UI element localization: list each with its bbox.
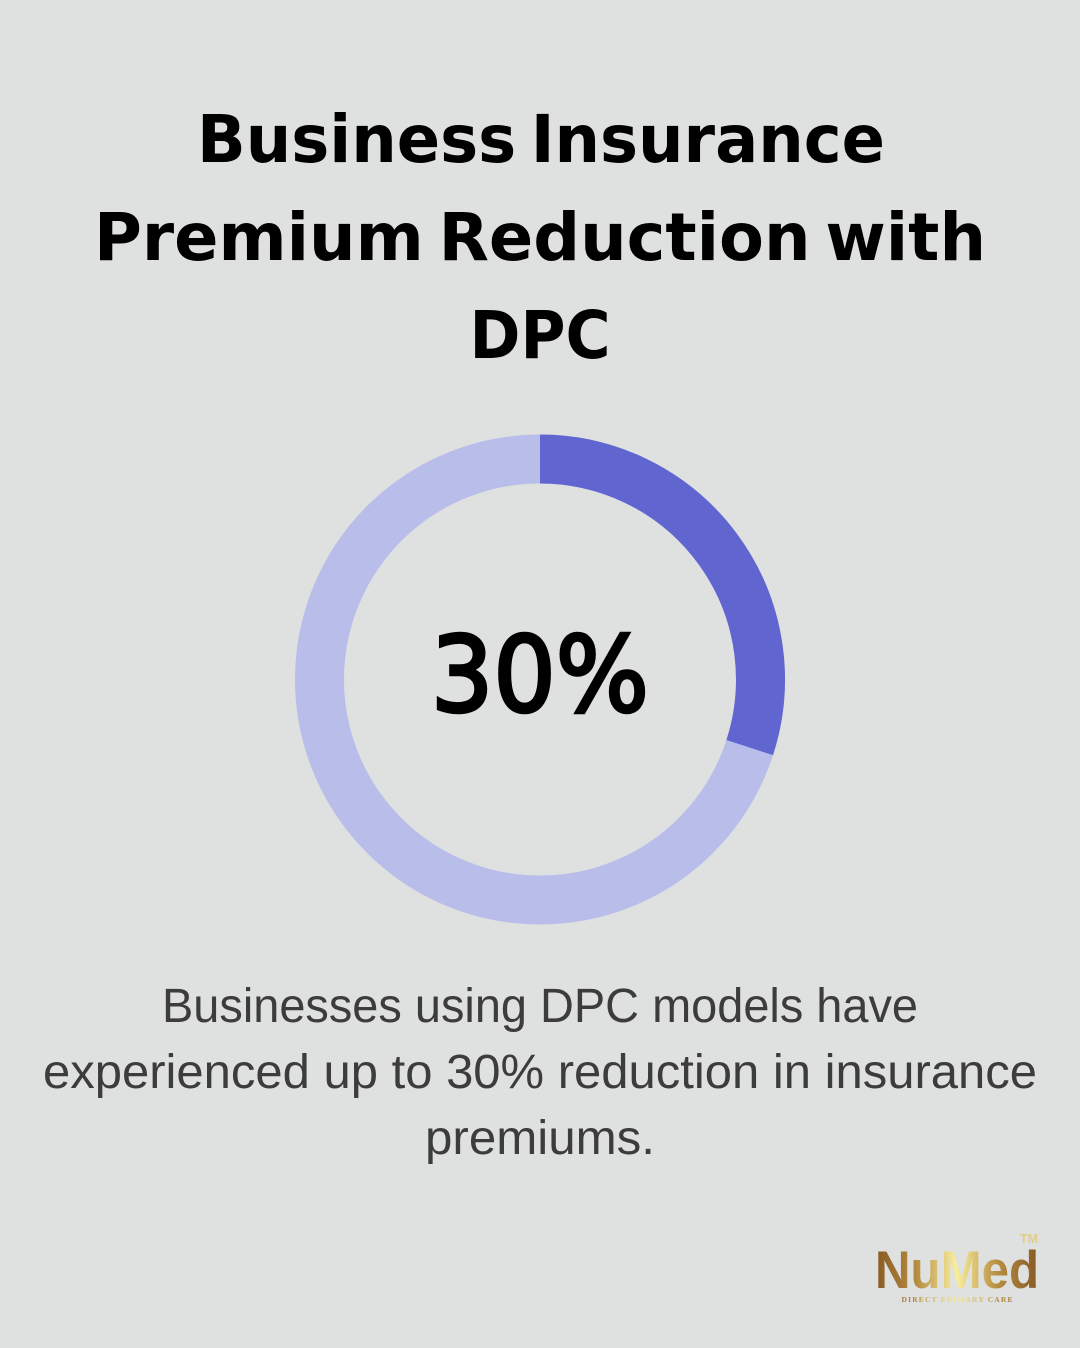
donut chart: 30% — [320, 459, 760, 900]
description text: experienced up to 30% reduction in insurance — [43, 1046, 1037, 1099]
logo trademark: TM — [1020, 1231, 1038, 1246]
description text: Businesses using DPC models have — [162, 980, 918, 1033]
logo tagline: DIRECT PRIMARY CARE — [902, 1295, 1012, 1304]
title: DPC — [470, 297, 610, 374]
title: Premium Reduction with — [94, 199, 986, 276]
donut centre value: 30% — [431, 614, 649, 736]
title: Business Insurance — [197, 101, 885, 178]
logo: NuMed Direct Primary Care — [875, 1231, 1039, 1304]
logo wordmark: NuMed — [875, 1241, 1039, 1300]
description text — [43, 980, 1037, 1165]
description text: premiums. — [425, 1112, 655, 1165]
title — [94, 101, 986, 374]
